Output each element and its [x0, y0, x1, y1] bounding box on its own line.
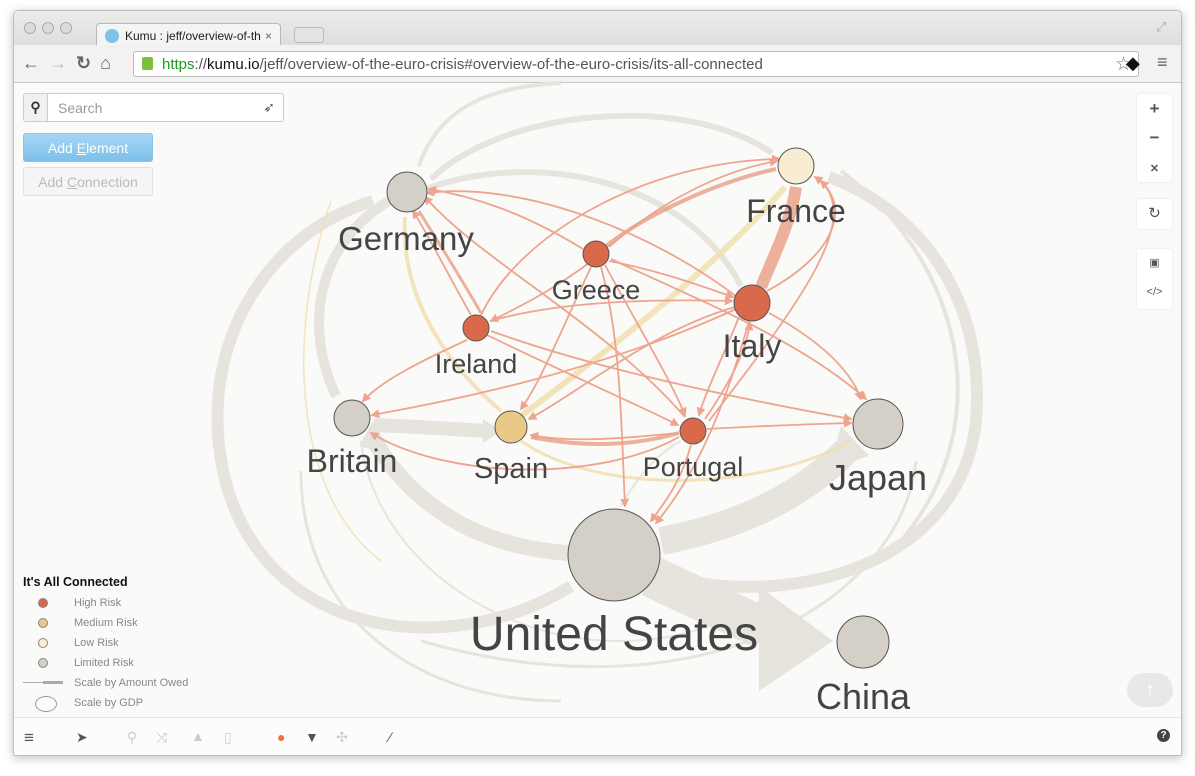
background arrowheads: [359, 419, 869, 691]
tab: ×: [265, 29, 272, 43]
legend item: amount owed: Scale by Amount Owed: [74, 677, 188, 689]
legend item: high risk: High Risk: [74, 597, 121, 609]
legend item: gdp: Scale by GDP: [74, 697, 143, 709]
add connection button: [23, 167, 153, 196]
legend item: low risk: [38, 637, 119, 649]
nav icons: ←→↻⌂: [22, 53, 120, 73]
tab: [96, 23, 281, 46]
legend item: limited risk: [38, 657, 134, 669]
node: China: China: [816, 676, 911, 717]
node: Portugal: [643, 418, 743, 482]
bottom toolbar: ✣: [336, 729, 348, 745]
node: Spain: Spain: [474, 453, 548, 485]
node: Portugal: Portugal: [643, 452, 743, 482]
node: Britain: [307, 400, 397, 479]
search box: Search: [58, 100, 102, 116]
upload cloud icon: ↑: [1144, 677, 1156, 702]
node: Spain: [474, 411, 548, 485]
search box: ➶: [263, 99, 275, 115]
legend item: high risk: [38, 597, 121, 609]
bottom toolbar: ➤: [76, 729, 88, 745]
url bar: https://kumu.io/jeff/overview-of-the-euro-crisis#overview-of-the-euro-crisis/its-all-connected: [162, 56, 763, 73]
red edges: [363, 159, 866, 523]
add connection button: Add Connection: [38, 174, 138, 190]
tab: Kumu : jeff/overview-of-th: [125, 29, 261, 43]
menu icon: ≡: [1157, 52, 1168, 72]
search box: ⚲: [30, 99, 41, 115]
legend item: medium risk: Medium Risk: [74, 617, 138, 629]
bottom toolbar: ▲: [191, 728, 205, 744]
node: Italy: [723, 285, 781, 364]
node: Greece: [552, 241, 640, 305]
legend item: low risk: Low Risk: [74, 637, 119, 649]
node: United States: [470, 509, 758, 661]
node: France: [746, 148, 846, 229]
node: Ireland: Ireland: [435, 349, 517, 379]
legend item: limited risk: Limited Risk: [74, 657, 134, 669]
background big edges: [217, 83, 977, 701]
legend title: It's All Connected: [23, 575, 128, 589]
node: China: [816, 616, 911, 717]
bottom toolbar: ?: [1160, 730, 1167, 741]
bottom toolbar: ▼: [305, 729, 319, 745]
window buttons: [24, 22, 72, 34]
add element button: [23, 133, 153, 162]
node: Britain: Britain: [307, 443, 397, 479]
bottom toolbar: [14, 717, 1183, 757]
title bar: [14, 11, 1183, 45]
layers icon: ◆: [1126, 53, 1140, 73]
node: Ireland: [435, 315, 517, 379]
new tab: [294, 27, 324, 43]
url bar: [133, 51, 1139, 77]
toolbar: [14, 45, 1183, 83]
node: Italy: Italy: [723, 328, 781, 364]
snapshot/embed controls: </>: [1147, 286, 1162, 298]
zoom controls: −: [1150, 128, 1159, 147]
search box: [23, 93, 284, 122]
canvas: [14, 83, 1183, 717]
bottom toolbar: ▯: [224, 729, 232, 745]
refresh control: [1137, 199, 1172, 229]
node: Japan: Japan: [829, 457, 927, 498]
zoom controls: ✕: [1150, 163, 1159, 175]
node: Japan: [829, 399, 927, 498]
bottom toolbar: ⤨: [156, 729, 167, 745]
zoom controls: [1137, 94, 1172, 182]
zoom controls: +: [1150, 99, 1159, 118]
add element button: Add Element: [48, 140, 128, 156]
node: Germany: [338, 172, 474, 257]
legend item: amount owed: [23, 677, 188, 689]
legend item: medium risk: [38, 617, 138, 629]
upload cloud icon: [1127, 673, 1173, 707]
url bar: ☆: [1115, 54, 1132, 75]
node: United States: United States: [470, 608, 758, 661]
node: France: France: [746, 193, 846, 229]
legend item: gdp: [35, 696, 143, 712]
bottom toolbar: ●: [277, 729, 285, 745]
legend: [23, 575, 188, 712]
refresh control: ↻: [1148, 205, 1161, 222]
yellow edges: [304, 187, 851, 561]
bottom toolbar: ⁄: [389, 729, 391, 745]
snapshot/embed controls: ▣: [1149, 257, 1160, 269]
node: Germany: Germany: [338, 220, 474, 257]
bottom toolbar: ⚲: [127, 729, 137, 745]
bottom toolbar: ≡: [24, 728, 34, 747]
snapshot/embed controls: [1137, 249, 1172, 309]
node: Greece: Greece: [552, 275, 640, 305]
fullscreen icon: ⤢: [1156, 19, 1166, 34]
